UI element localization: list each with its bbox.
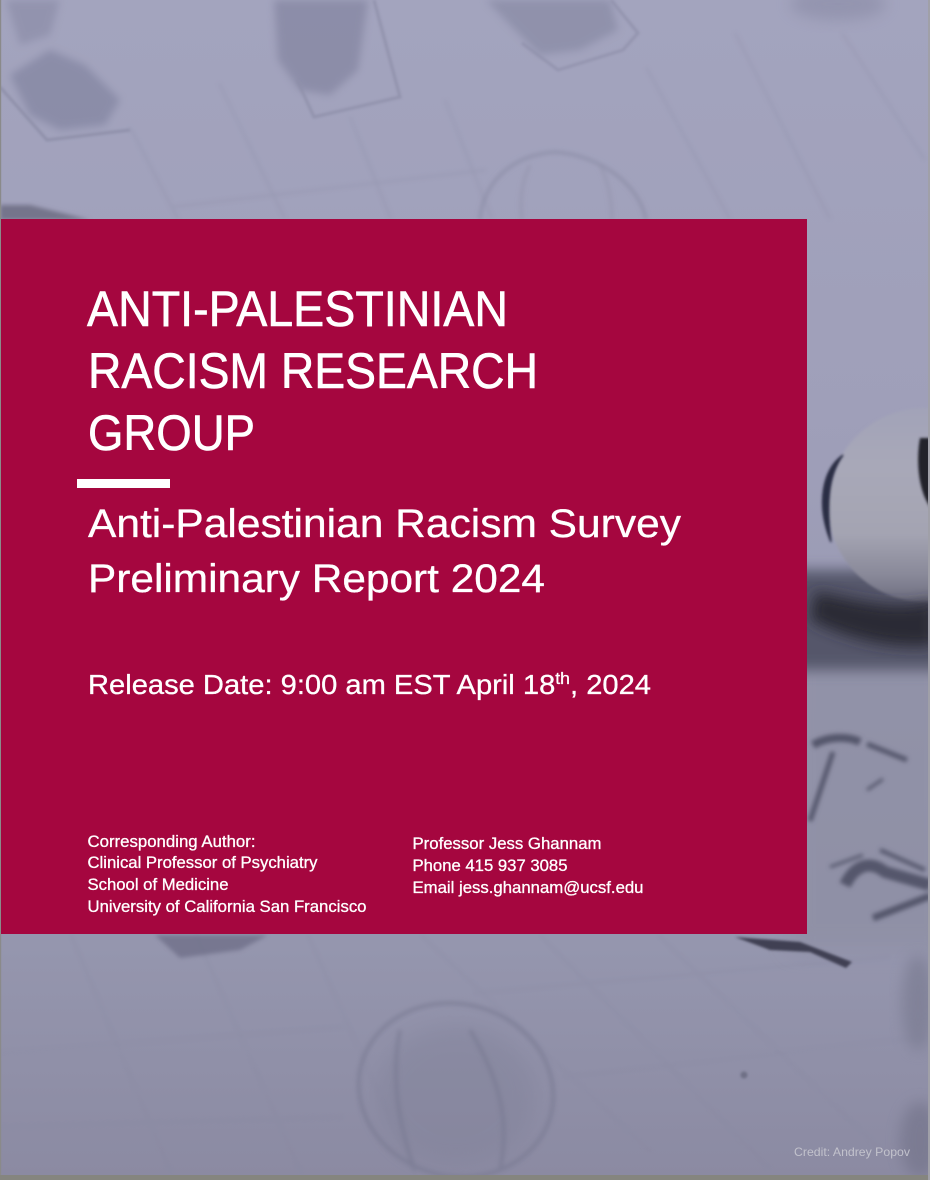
- subtitle: Preliminary Report 2024: [88, 557, 545, 601]
- panel: crimson title block: [1, 219, 807, 934]
- contact details: Professor Jess Ghannam: [412, 835, 602, 853]
- pencil mark at panel top left: [0, 205, 90, 220]
- corresponding author details: Clinical Professor of Psychiatry: [88, 854, 318, 872]
- pencil mark top right: [790, 0, 886, 20]
- photo credit: Credit: Andrey Popov: [794, 1145, 910, 1159]
- contact details: [412, 835, 644, 897]
- title: GROUP: [88, 405, 255, 461]
- subtitle: Anti-Palestinian Racism Survey: [88, 502, 681, 546]
- corresponding author details: Corresponding Author:: [88, 833, 256, 851]
- corresponding author details: University of California San Francisco: [88, 898, 366, 916]
- title divider: [77, 479, 170, 488]
- corresponding author details: [88, 833, 366, 916]
- corresponding author details: School of Medicine: [88, 876, 228, 894]
- subtitle: [88, 502, 681, 601]
- title: [87, 281, 538, 461]
- title: RACISM RESEARCH: [88, 343, 538, 399]
- title: ANTI-PALESTINIAN: [87, 281, 508, 337]
- pencil mark top centre left: [274, 0, 400, 117]
- pencil mark top centre right: [486, 0, 638, 70]
- contact details: Email jess.ghannam@ucsf.edu: [412, 879, 644, 897]
- pencil dot: [740, 1072, 748, 1078]
- pencil mark above panel: [480, 152, 646, 220]
- release date: , 2024: [570, 669, 651, 700]
- pencil shavings and eraser ball at right side: [735, 408, 930, 1178]
- release date: th: [555, 669, 570, 688]
- release date: Release Date: 9:00 am EST April 18: [88, 669, 537, 700]
- contact details: Phone 415 937 3085: [412, 857, 568, 875]
- pencil mark bottom centre: [339, 982, 573, 1180]
- pencil mark below panel left: [155, 935, 268, 958]
- pencil mark top left: [0, 0, 130, 140]
